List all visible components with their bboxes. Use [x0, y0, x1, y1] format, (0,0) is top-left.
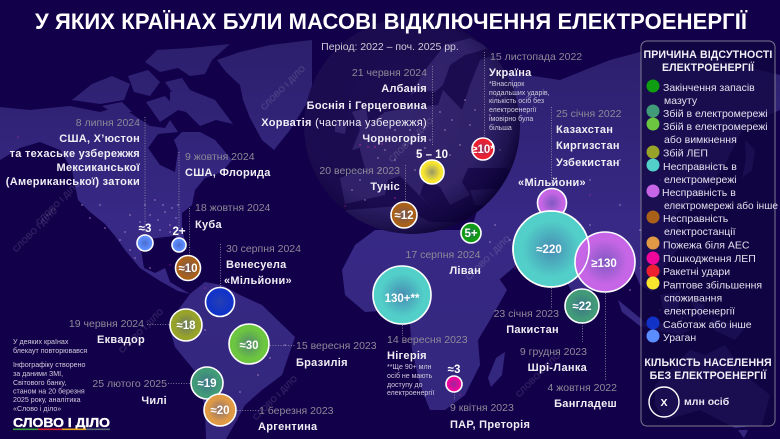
label: USA Florida: 9 жовтня 2024	[185, 151, 255, 163]
note: repeated blackouts and sources: блекаут повторювався	[13, 347, 87, 355]
label: Nigeria: доступу до	[387, 382, 423, 389]
legend item: grid fault or other: Несправність в	[662, 187, 736, 199]
bubble: USA Houston: ≈3	[139, 223, 151, 235]
legend item: hurricane	[646, 330, 696, 344]
bubble: Pakistan	[513, 211, 589, 287]
bubble: Ecuador: ≈18	[176, 320, 196, 332]
legend item: sabotage: Саботаж або інше	[663, 319, 752, 331]
bubble: Chile	[191, 367, 223, 399]
legend item: power plant fault: Несправність	[663, 213, 729, 225]
label: USA Florida: США, Флорида	[185, 167, 271, 179]
label: Tunisia: 20 вересня 2023	[319, 165, 400, 177]
label: Chile: 25 лютого 2025	[92, 378, 167, 390]
label: Central Asia: 25 січня 2022	[556, 108, 622, 120]
bubble: Balkans	[416, 149, 448, 184]
note: repeated blackouts and sources: Інфографіку створено	[13, 361, 85, 369]
watermarks: СЛОВО І ДІЛО	[513, 350, 563, 399]
size legend heading: КІЛЬКІСТЬ НАСЕЛЕННЯ	[644, 357, 772, 369]
legend item: grid failure or shutdown: або вимкнення	[664, 134, 737, 146]
label: Ukraine: подальших ударів,	[489, 89, 550, 97]
bubble: Florida	[172, 226, 186, 252]
legend item: missile strikes: Ракетні удари	[663, 266, 730, 278]
label: USA Houston: США, Х’юстон	[59, 133, 140, 145]
bubble: Central Asia	[538, 188, 566, 218]
bubble: Cuba	[176, 256, 200, 280]
bubble: Lebanon	[461, 223, 481, 243]
bubble: Chile: ≈19	[197, 378, 217, 390]
label: USA Houston: 8 липня 2024	[76, 117, 140, 129]
label: Ecuador	[69, 318, 145, 346]
bubble: Florida: 2+	[172, 226, 186, 238]
label: Balkans: Чорногорія	[362, 133, 427, 145]
legend item: grid fault or other: електромережі або інше	[664, 200, 778, 212]
legend item: fuel	[646, 80, 755, 107]
legend item: power plant fault	[646, 210, 736, 238]
label: Nigeria: Нігерія	[387, 350, 427, 362]
label: USA Florida	[185, 151, 271, 179]
label: Ukraine: 15 листопада 2022	[490, 51, 582, 63]
watermarks: СЛОВО І ДІЛО	[116, 306, 166, 355]
label: Ecuador: 19 червня 2024	[69, 318, 144, 330]
label: Nigeria	[387, 334, 468, 397]
bubble: USA Houston	[137, 223, 153, 251]
label: Tunisia	[319, 165, 400, 193]
bubble: Ukraine: ≥10*	[471, 144, 495, 156]
legend item: consumption surge	[646, 276, 762, 318]
bubble: Bangladesh	[513, 211, 635, 292]
label: Nigeria: **Ще 90+ млн	[387, 364, 432, 371]
bubble: Pakistan: ≈220	[536, 244, 562, 256]
label: Lebanon: Ліван	[449, 265, 481, 277]
legend heading	[644, 49, 772, 74]
bubble: Sri Lanka	[565, 289, 599, 323]
watermarks: СЛОВО І ДІЛО	[386, 115, 436, 164]
note: repeated blackouts and sources: Світового банку,	[13, 379, 66, 387]
watermarks	[10, 63, 563, 422]
label: Balkans: Хорватія (частина узбережжя)	[261, 117, 427, 129]
bubble: Cuba: ≈10	[178, 263, 198, 275]
label: USA Houston: (Американської) затоки	[6, 176, 140, 188]
label: Ukraine: електроенергії	[489, 106, 536, 114]
label: Central Asia: «Мільйони»	[518, 177, 586, 189]
globe: Europe zoom	[304, 18, 530, 245]
label: Pakistan: Пакистан	[506, 324, 559, 336]
legend item: consumption surge: Раптове збільшення	[663, 280, 762, 292]
legend item: NPP fire	[646, 236, 750, 252]
title: У ЯКИХ КРАЇНАХ БУЛИ МАСОВІ ВІДКЛЮЧЕННЯ ЕЛЕКТРОЕНЕРГІЇ	[35, 9, 748, 34]
label: Pakistan: 23 січня 2023	[494, 308, 559, 320]
legend heading: ЕЛЕКТРОЕНЕРГІЇ	[662, 61, 755, 74]
label: Cuba: Куба	[195, 219, 222, 231]
label: Balkans	[261, 67, 428, 145]
legend item: consumption surge: споживання	[664, 292, 722, 304]
watermarks: СЛОВО І ДІЛО	[250, 373, 300, 422]
bubble: Ukraine	[471, 138, 495, 160]
label: Nigeria: електроенергії	[387, 389, 434, 397]
size legend symbol	[649, 387, 730, 417]
legend item: grid fault: електромережі	[664, 174, 737, 186]
legend item: line failure	[646, 146, 708, 160]
logo: СЛОВО І ДІЛО	[13, 415, 110, 430]
label: Nigeria: осіб не мають	[387, 372, 433, 380]
label: Brazil: 15 вересня 2023	[296, 340, 377, 352]
label: Ecuador: Еквадор	[97, 334, 145, 346]
label: Ukraine: більша	[489, 124, 512, 132]
legend item: consumption surge: електроенергії	[664, 306, 735, 318]
label: Brazil	[296, 340, 377, 369]
legend item: fuel: Закінчення запасів	[663, 82, 755, 94]
label: Brazil: Бразилія	[296, 357, 348, 369]
watermarks: СЛОВО І ДІЛО	[10, 205, 60, 254]
legend item: grid failure or shutdown: Збій в електромережі	[663, 121, 768, 133]
label: Cuba: 18 жовтня 2024	[195, 202, 271, 214]
panel: legend	[641, 41, 778, 426]
label: USA Houston: та техаське узбережжя	[10, 148, 140, 160]
note: repeated blackouts and sources	[13, 338, 87, 413]
label: Central Asia	[518, 108, 622, 189]
legend item: NPP fire: Пожежа біля АЕС	[663, 240, 750, 252]
legend item: fuel: мазуту	[664, 95, 698, 107]
leader lines	[145, 52, 606, 410]
legend item: grid failure or shutdown	[646, 118, 768, 146]
label: Argentina: Аргентина	[258, 421, 318, 433]
note: repeated blackouts and sources: «Слово і діло»	[13, 405, 61, 413]
bubble: Sri Lanka: ≈22	[572, 301, 592, 313]
watermarks: СЛОВО І ДІЛО	[463, 233, 513, 282]
label: Chile: Чилі	[141, 395, 167, 407]
label: Tunisia: Туніс	[370, 181, 400, 193]
label: Argentina: 1 березня 2023	[259, 405, 334, 417]
bubble: Brazil: ≈30	[239, 340, 259, 352]
bubble: Nigeria	[373, 266, 431, 324]
legend item: grid fault	[646, 158, 737, 186]
label: Balkans: 21 червня 2024	[352, 67, 427, 79]
bubble: Brazil	[229, 324, 269, 364]
note: repeated blackouts and sources: за даними ЗМІ,	[13, 370, 63, 378]
label: Balkans: Боснія і Герцеговина	[307, 100, 428, 112]
bubble: Bangladesh: ≥130	[591, 258, 617, 270]
label: Bangladesh: 4 жовтня 2022	[547, 382, 617, 394]
watermarks: СЛОВО І ДІЛО	[33, 178, 83, 227]
bubble: Venezuela	[206, 288, 234, 316]
note: repeated blackouts and sources: станом на 20 березня	[13, 388, 85, 396]
legend item: grid failure	[646, 104, 768, 120]
bubble: Tunisia	[391, 202, 417, 228]
legend item: line damage: Пошкодження ЛЕП	[663, 253, 756, 265]
bubble: Argentina: ≈20	[210, 405, 230, 417]
bubble: Tunisia: ≈12	[394, 210, 414, 222]
legend item: grid fault: Несправність в	[663, 161, 737, 173]
label: Nigeria: 14 вересня 2023	[387, 334, 468, 346]
label: Balkans: Албанія	[381, 83, 427, 95]
size legend heading	[644, 357, 772, 382]
bubble: South Africa	[446, 364, 462, 392]
bubble: Ecuador	[170, 309, 202, 341]
label: Pakistan	[494, 308, 559, 336]
label: Venezuela: Венесуела	[226, 259, 287, 271]
label: Ukraine	[489, 51, 582, 132]
legend item: grid fault or other	[646, 184, 778, 212]
bubble: Balkans: 5 – 10	[416, 149, 448, 161]
city lights	[18, 137, 700, 395]
label: South Africa	[450, 402, 530, 431]
bubble: Argentina	[204, 394, 236, 426]
legend item: hurricane: Ураган	[663, 332, 696, 344]
label: Lebanon	[406, 249, 481, 277]
period subtitle: Період: 2022 – поч. 2025 рр.	[321, 41, 459, 53]
label: Sri Lanka	[520, 346, 588, 374]
label: Cuba	[195, 202, 271, 231]
label: Ukraine: імовірно була	[489, 115, 533, 123]
bubble: South Africa: ≈3	[448, 364, 460, 376]
legend item: sabotage	[646, 316, 752, 331]
label: Central Asia: Киргизстан	[556, 140, 620, 152]
label: USA Houston	[6, 117, 141, 188]
label: Bangladesh	[547, 382, 617, 410]
legend item: grid failure: Збій в електромережі	[663, 108, 768, 120]
label: Central Asia: Казахстан	[556, 124, 613, 136]
size legend symbol: X	[660, 397, 668, 409]
label: Sri Lanka: 9 грудня 2023	[520, 346, 587, 358]
label: Argentina	[258, 405, 334, 433]
legend item: line failure: Збій ЛЕП	[663, 148, 708, 160]
size legend symbol: млн осіб	[684, 396, 730, 408]
legend item: power plant fault: електростанції	[664, 226, 736, 238]
label: Bangladesh: Бангладеш	[554, 398, 617, 410]
legend heading: ПРИЧИНА ВІДСУТНОСТІ	[644, 49, 772, 61]
label: Venezuela	[224, 243, 301, 287]
note: repeated blackouts and sources: У деяких країнах	[13, 338, 69, 346]
label: Central Asia: Узбекистан	[556, 157, 620, 169]
bubble: Nigeria: 130+**	[385, 293, 420, 305]
note: repeated blackouts and sources: 2025 року, аналітика	[13, 396, 81, 404]
label: South Africa: 9 квітня 2023	[450, 402, 514, 414]
size legend heading: БЕЗ ЕЛЕКТРОЕНЕРГІЇ	[650, 369, 767, 382]
label: USA Houston: Мексиканської	[57, 162, 141, 174]
label: Ukraine: Україна	[489, 67, 532, 79]
label: Chile	[92, 378, 167, 407]
label: Ukraine: *Внаслідок	[489, 80, 525, 88]
label: Ukraine: кількість осіб без	[489, 97, 544, 105]
label: South Africa: ПАР, Преторія	[450, 419, 530, 431]
label: Sri Lanka: Шрі-Ланка	[528, 362, 588, 374]
label: Venezuela: 30 серпня 2024	[226, 243, 301, 255]
watermarks: СЛОВО І ДІЛО	[258, 63, 308, 112]
bubble: Lebanon: 5+	[464, 228, 478, 240]
label: Lebanon: 17 серпня 2024	[406, 249, 481, 261]
label: Venezuela: «Мільйони»	[224, 275, 292, 287]
